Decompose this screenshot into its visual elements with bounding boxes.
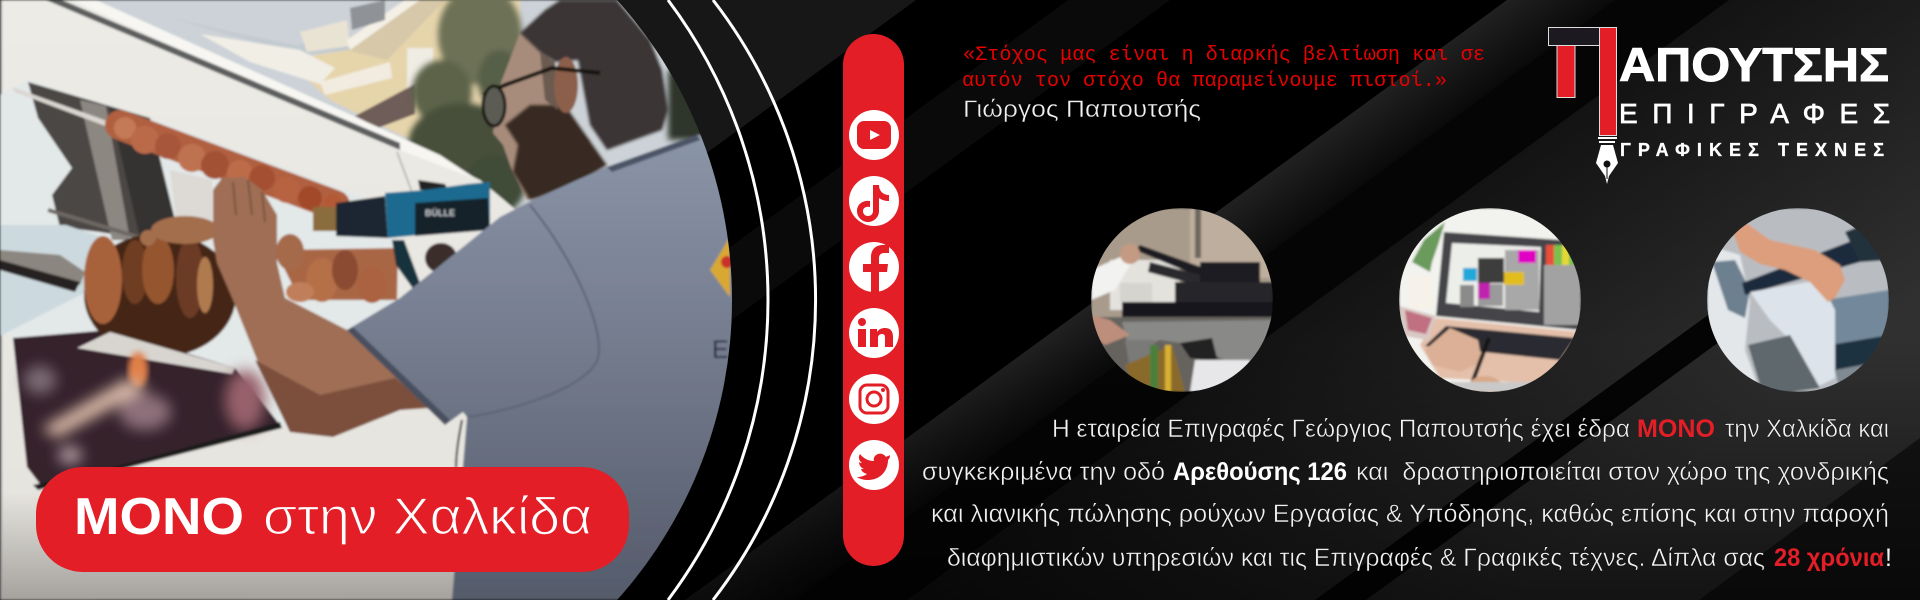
icon: linkedin — [849, 308, 899, 358]
line 3: και λιανικής πώλησης ρούχων Εργασίας & Υπόδησης, καθώς επίσης και στην παροχή — [931, 500, 1889, 528]
line 1: ΜΟΝΟ — [1637, 415, 1715, 443]
lower kebabs and blurred grill — [13, 216, 398, 490]
logo mark — [1548, 28, 1616, 136]
service photo: laptop design — [1399, 208, 1581, 398]
upper kebab — [114, 117, 342, 212]
wrap image on van — [0, 80, 283, 422]
decorative white arcs — [668, 0, 816, 600]
van body — [0, 0, 540, 600]
red banner pill — [36, 467, 629, 572]
line 2: Αρεθούσης 126 — [1173, 458, 1347, 486]
social media bar — [843, 34, 904, 566]
line 1: Η εταιρεία Επιγραφές Γεώργιος Παπουτσής έχει έδρα — [1052, 415, 1630, 443]
power cable — [456, 420, 462, 468]
line 2 — [922, 458, 1889, 486]
shirt badge — [710, 237, 730, 297]
line 2: και δραστηριοποιείται στον χώρο της χονδρικής — [1356, 458, 1889, 486]
quote: αυτόν τον στόχο θα παραμείνουμε πιστοί.» — [962, 70, 1447, 93]
line 1: την Χαλκίδα και — [1725, 415, 1889, 443]
shirt lettering: Επ — [712, 336, 746, 364]
quote — [962, 44, 1485, 123]
service photo: heat press — [1091, 208, 1273, 392]
line 4: διαφημιστικών υπηρεσιών και τις Επιγραφές & Γραφικές τέχνες. Δίπλα σας — [947, 544, 1765, 572]
company description — [922, 415, 1892, 572]
banner text: στην Χαλκίδα — [263, 488, 592, 546]
gun brand: BÜLLE — [425, 208, 455, 218]
logo wordmark: ΓΡΑΦΙΚΕΣ ΤΕΧΝΕΣ — [1620, 140, 1884, 160]
icon: youtube — [849, 110, 899, 160]
line 4: 28 χρόνια — [1774, 544, 1885, 572]
quote author: Γιώργος Παπουτσής — [963, 96, 1201, 123]
quote: «Στόχος μας είναι η διαρκής βελτίωση και σε — [963, 44, 1485, 67]
banner text: ΜΟΝΟ — [74, 488, 244, 546]
logo wordmark: ΕΠΙΓΡΑΦΕΣ — [1619, 98, 1890, 129]
icon: twitter — [849, 440, 899, 490]
sky and buildings — [96, 0, 692, 210]
arm and hand — [212, 176, 428, 410]
icon: pen nib — [1596, 137, 1618, 184]
logo wordmark: ΑΠΟΥΤΣΗΣ — [1619, 38, 1889, 91]
icon: instagram — [849, 374, 899, 424]
line 4: ! — [1885, 544, 1892, 572]
man: hair, face and beard — [483, 0, 668, 200]
heat gun — [313, 182, 490, 290]
service photo: printer roll — [1707, 208, 1889, 392]
logo — [1548, 28, 1890, 184]
man: polo shirt — [347, 135, 760, 600]
photo: technician applying vehicle wrap — [0, 0, 760, 600]
logo wordmark — [1619, 38, 1890, 160]
banner text — [74, 488, 592, 546]
icon: tiktok — [849, 176, 899, 226]
icon: facebook — [849, 242, 899, 292]
tree — [408, 0, 708, 215]
line 2: συγκεκριμένα την οδό — [922, 458, 1165, 486]
